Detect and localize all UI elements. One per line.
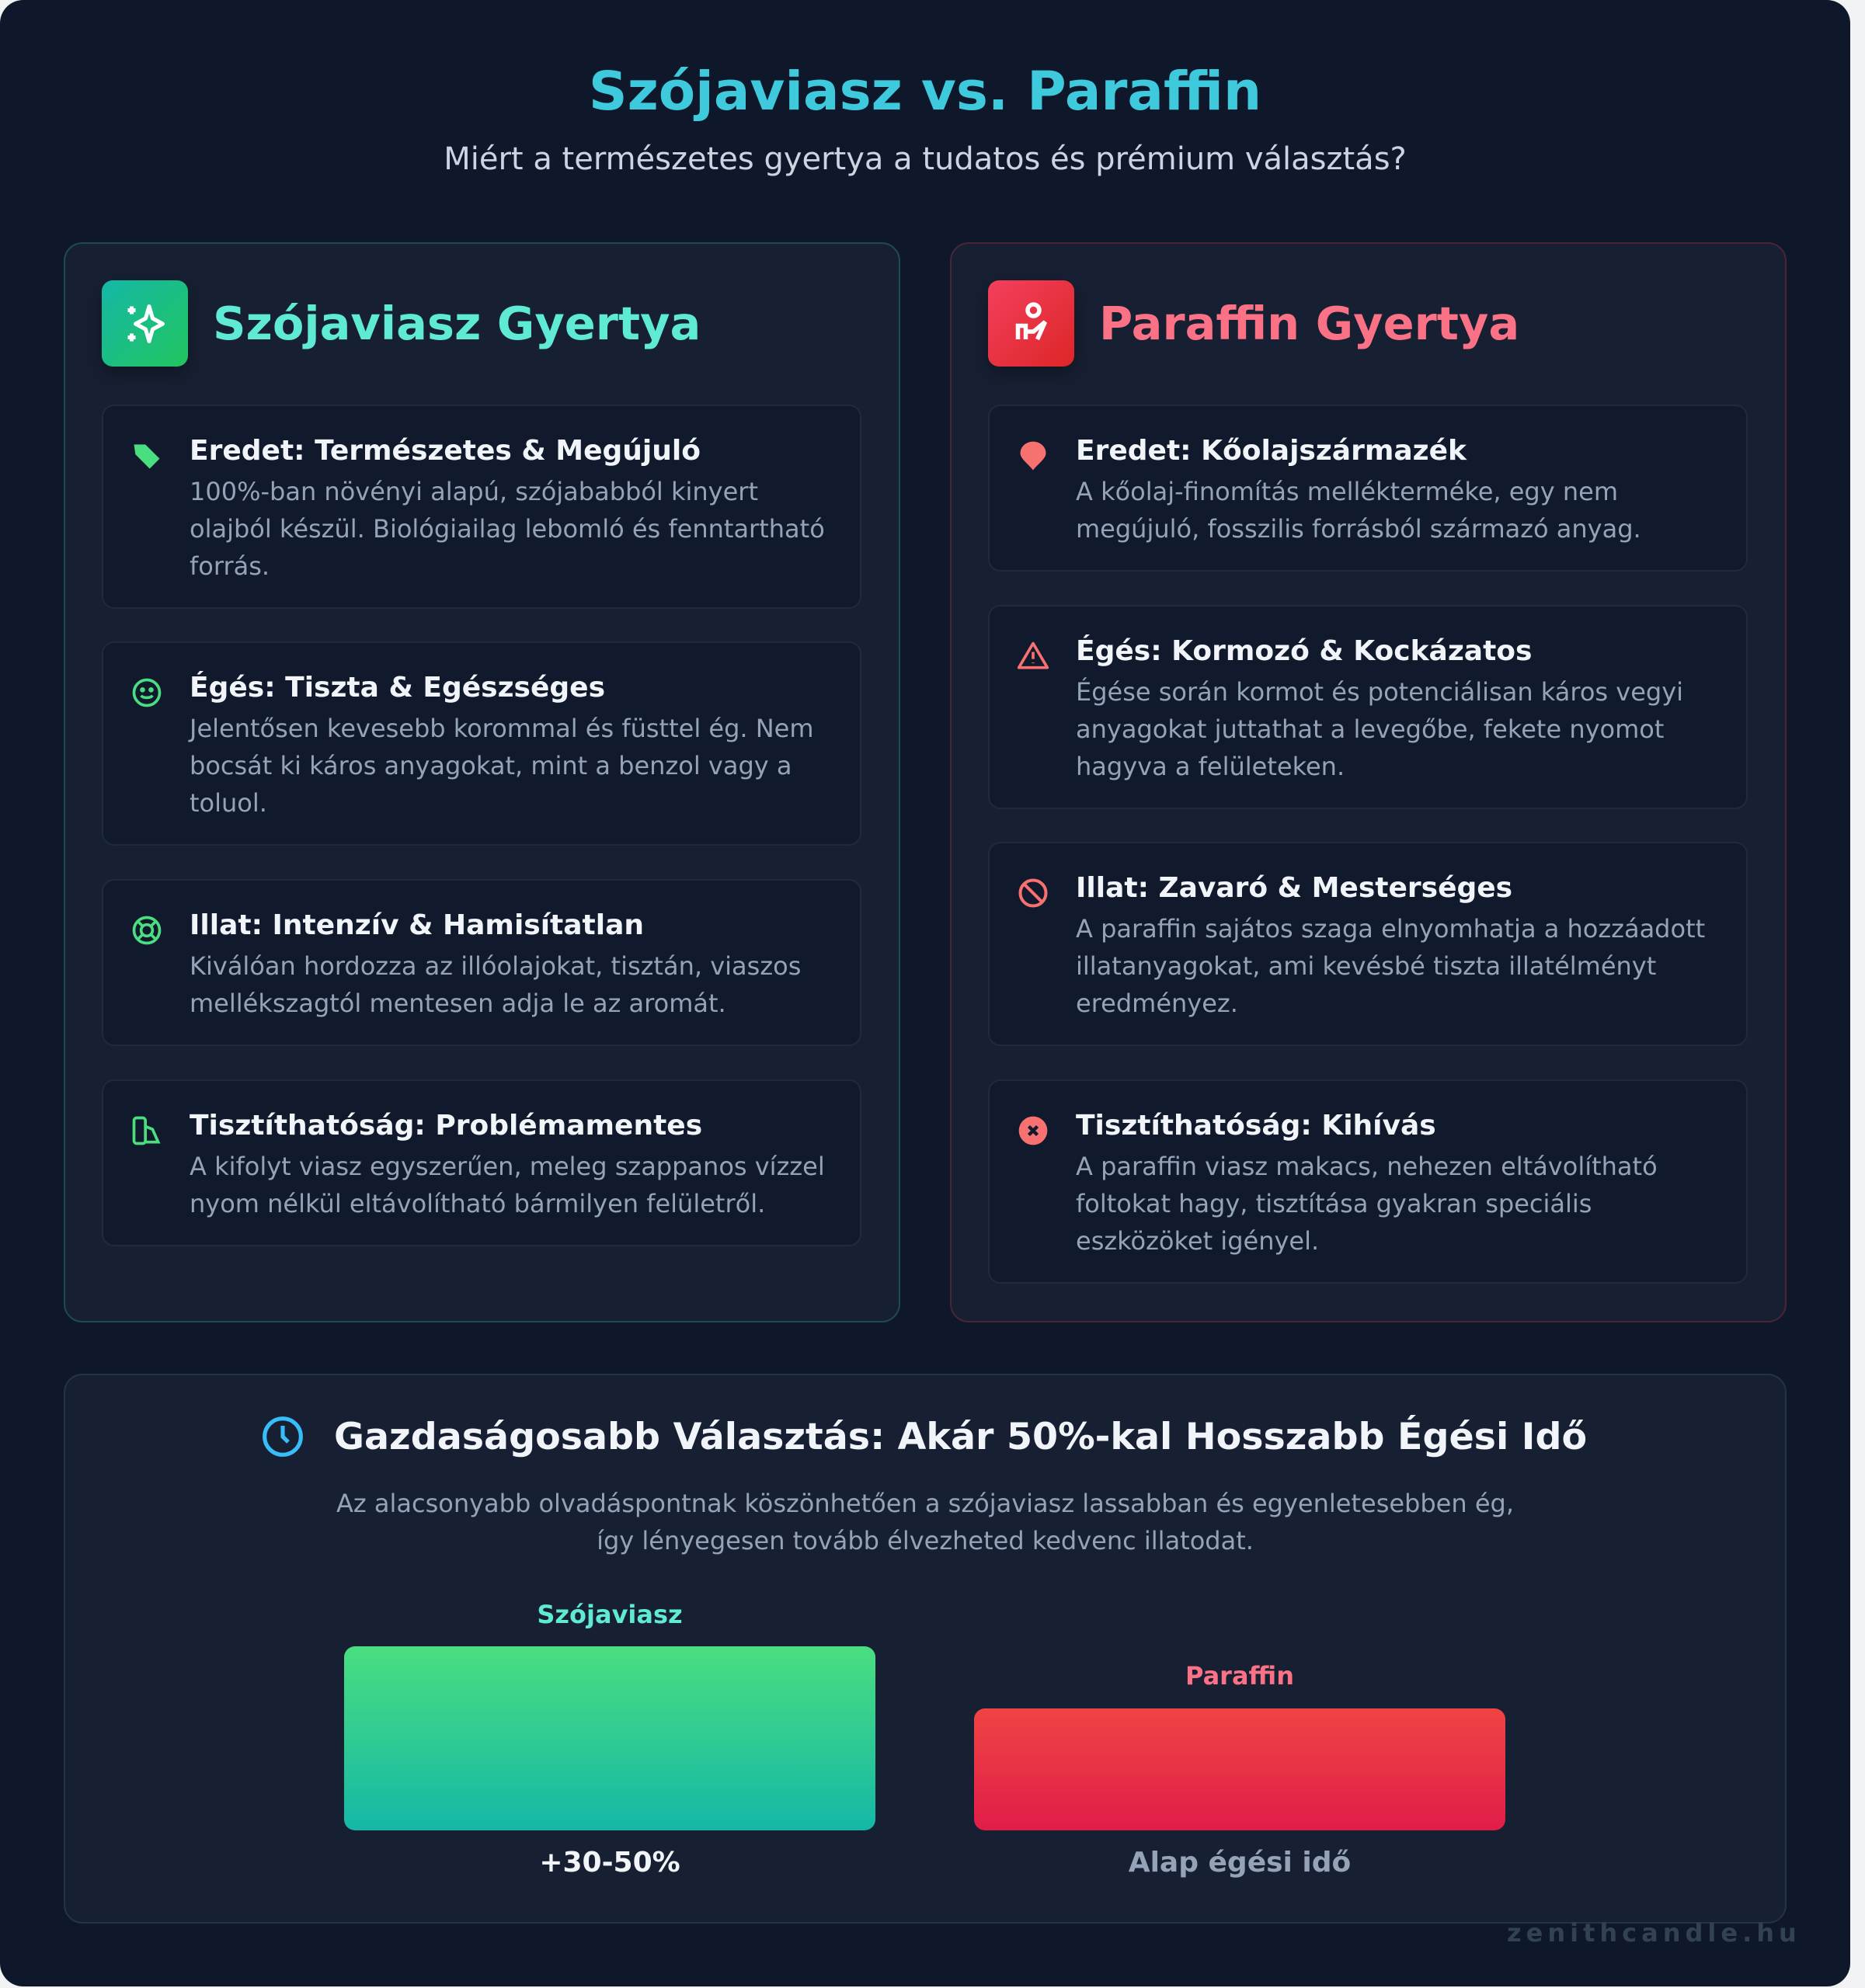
card: paraffin burning: Égése során kormot és potenciálisan káros vegyi anyagokat juttathat a levegőbe, fekete nyomot hagyva a felületeken. [1076,677,1683,781]
heading: burn time: Gazdaságosabb Választás: Akár 50%-kal Hosszabb Égési Idő [334,1416,1587,1458]
card: soy origin: 100%-ban növényi alapú, szójababból kinyert olajból készül. Biológiailag lebomló és fenntartható forrás. [190,477,825,581]
card: paraffin origin [988,405,1748,572]
value: soy: +30-50% [539,1847,680,1879]
card: soy scent: Illat: Intenzív & Hamisítatlan [190,909,644,941]
card: paraffin scent [988,842,1748,1046]
card: paraffin scent: A paraffin sajátos szaga elnyomhatja a hozzáadott illatanyagokat, ami kevésbé tiszta illatélményt eredményez. [1076,914,1705,1018]
card: soy cleaning: Tisztíthatóság: Problémamentes [190,1110,702,1142]
icon: clock [263,1416,303,1457]
card: soy cleaning [102,1079,861,1246]
title: Szójaviasz vs. Paraffin [589,61,1261,123]
card: soy burning [102,641,861,846]
icon: paraffin [988,280,1074,367]
card: paraffin cleaning: A paraffin viasz makacs, nehezen eltávolítható foltokat hagy, tisztítása gyakran speciális eszközöket igényel. [1076,1152,1658,1256]
watermark: zenithcandle.hu [1507,1918,1801,1948]
value: paraffin: Alap égési idő [1129,1847,1351,1879]
card: paraffin burning: Égés: Kormozó & Kockázatos [1076,635,1532,667]
card: paraffin burning [988,605,1748,809]
card: soy scent [102,879,861,1046]
heading: paraffin: Paraffin Gyertya [1099,297,1519,350]
card: soy origin [102,405,861,609]
description [336,1489,1514,1555]
panel: burn time [64,1374,1787,1924]
heading: soy: Szójaviasz Gyertya [213,297,701,350]
card: soy burning: Jelentősen kevesebb korommal és füsttel ég. Nem bocsát ki káros anyagokat, mint a benzol vagy a toluol. [190,714,814,818]
panel: soy [64,242,900,1322]
subtitle: Miért a természetes gyertya a tudatos és prémium választás? [444,141,1407,177]
card: paraffin cleaning: Tisztíthatóság: Kihívás [1076,1110,1436,1142]
icon: sparkles [102,280,188,367]
description: Az alacsonyabb olvadáspontnak köszönhetően a szójaviasz lassabban és egyenletesebben ég, [336,1489,1514,1518]
label: soy: Szójaviasz [537,1600,683,1629]
bar chart [344,1600,1505,1879]
card: paraffin origin: Eredet: Kőolajszármazék [1076,435,1467,467]
card: soy burning: Égés: Tiszta & Egészséges [190,672,605,704]
card: soy origin: Eredet: Természetes & Megújuló [190,435,701,467]
card: soy cleaning: A kifolyt viasz egyszerűen, meleg szappanos vízzel nyom nélkül eltávolítható bármilyen felületről. [190,1152,825,1218]
panel: paraffin [950,242,1787,1322]
card: paraffin origin: A kőolaj-finomítás mellékterméke, egy nem megújuló, fosszilis forrásból származó anyag. [1076,477,1641,544]
card: paraffin scent: Illat: Zavaró & Mesterséges [1076,872,1512,904]
card: soy scent: Kiválóan hordozza az illóolajokat, tisztán, viaszos mellékszagtól mentesen adja le az aromát. [190,951,801,1018]
card: paraffin cleaning [988,1079,1748,1284]
bar: soy [344,1646,875,1830]
bar: paraffin [974,1708,1505,1830]
description: így lényegesen tovább élvezheted kedvenc illatodat. [597,1526,1254,1555]
label: paraffin: Paraffin [1185,1661,1294,1691]
